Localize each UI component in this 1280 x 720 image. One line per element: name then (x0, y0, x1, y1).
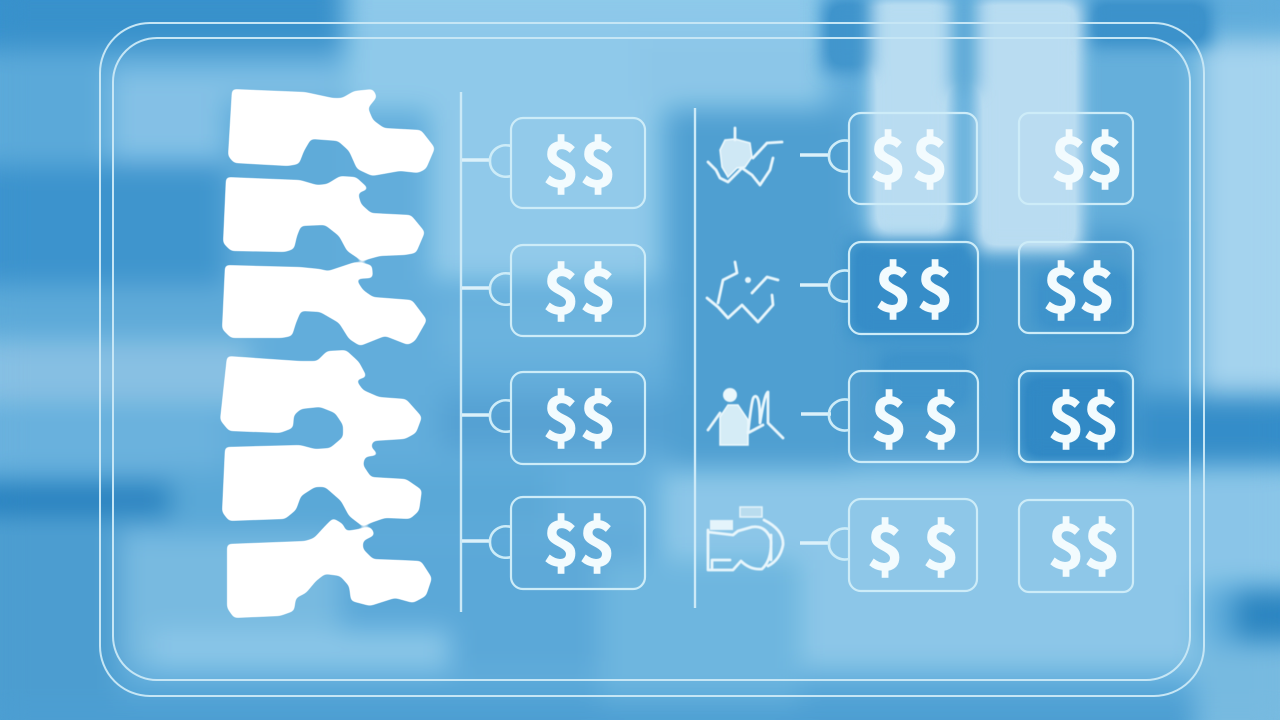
left tag row 1 (462, 115, 645, 208)
left tag row 3: $ (580, 369, 616, 459)
left tag row 2 (462, 242, 645, 336)
right tag row 4 (1019, 497, 1133, 592)
right tag row 1 (1019, 110, 1133, 204)
left tag row 1: $ (580, 115, 616, 205)
vertebra 2 (223, 176, 425, 261)
left tag row 3: $ (543, 369, 579, 459)
middle tag row 1: $ (912, 110, 948, 200)
right tag row 4: $ (1048, 497, 1084, 587)
middle divider (694, 108, 696, 608)
middle tag row 1: $ (870, 110, 906, 200)
right tag row 3: $ (1048, 370, 1084, 460)
spine illustration (220, 89, 435, 618)
right tag row 1: $ (1051, 110, 1087, 200)
vertebra 1 (228, 89, 435, 176)
vertebra 6 (227, 518, 432, 618)
left tag row 4: $ (543, 494, 579, 584)
icon: patient with tubing (708, 388, 783, 445)
middle tag row 4 (800, 498, 977, 591)
left cost column (462, 115, 645, 589)
middle tag row 3 (801, 370, 978, 462)
middle tag row 2: $ (875, 240, 911, 330)
inner glass frame (113, 38, 1190, 680)
icon: spine scan (708, 128, 782, 185)
middle cost column (800, 110, 978, 591)
left tag row 4 (462, 494, 645, 589)
right tag row 2: $ (1043, 241, 1079, 331)
left tag row 2: $ (543, 242, 579, 332)
left tag row 3 (462, 369, 645, 464)
vertebra 3 (222, 262, 427, 346)
middle tag row 3: $ (923, 370, 959, 460)
vertebrae 4 and 5 (220, 350, 422, 526)
right tag row 2 (1019, 241, 1133, 333)
left tag row 1: $ (543, 115, 579, 205)
left tag row 4: $ (579, 494, 615, 584)
middle tag row 4: $ (923, 498, 959, 588)
middle tag row 1 (800, 110, 977, 204)
middle tag row 2 (800, 240, 978, 334)
middle tag row 4: $ (867, 498, 903, 588)
left tag row 2: $ (580, 242, 616, 332)
right tag row 3 (1019, 370, 1133, 462)
left divider (460, 92, 462, 612)
right tag row 4: $ (1084, 497, 1120, 587)
right tag row 1: $ (1087, 110, 1123, 200)
middle tag row 3: $ (871, 370, 907, 460)
middle tag row 2: $ (917, 240, 953, 330)
right tag row 3: $ (1083, 370, 1119, 460)
right cost column (1019, 110, 1133, 592)
icon: medical device (708, 507, 783, 570)
right tag row 2: $ (1079, 241, 1115, 331)
icon: nerve path (707, 262, 778, 322)
